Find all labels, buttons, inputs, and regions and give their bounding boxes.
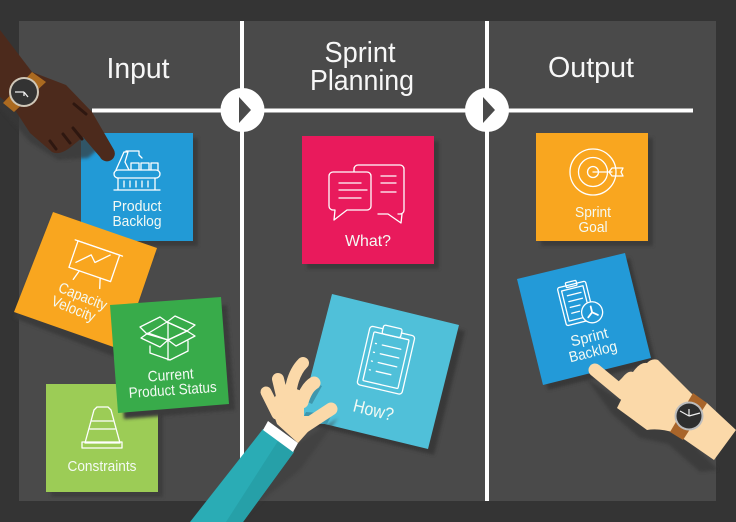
label: [575, 204, 612, 236]
card: Sprint Goal: [536, 133, 653, 246]
label: Product Status: [128, 379, 217, 402]
card: Constraints: [46, 384, 163, 497]
icon: traffic cone: [82, 407, 122, 448]
label: Current: [147, 365, 195, 386]
icon: presentation board: [63, 240, 122, 292]
sleeve: [190, 429, 294, 522]
label: [127, 364, 217, 402]
label: Product: [112, 198, 162, 215]
fingers and palm: [266, 363, 331, 443]
icon: clipboard with clock: [556, 276, 605, 329]
arrow: input to planning: [220, 88, 264, 132]
card: How?: [300, 294, 465, 455]
heading: Input: Input: [106, 53, 170, 85]
label: [564, 323, 619, 366]
cuff: [263, 421, 298, 452]
hand: light hand with sleeve holding how card: [190, 363, 338, 522]
icon: conveyor belt robot: [114, 151, 160, 190]
icon: clipboard: [357, 322, 416, 395]
heading: Sprint Planning: Planning: [310, 65, 414, 97]
heading: Output: Output: [548, 52, 634, 84]
icon: watch: [3, 72, 46, 112]
icon: target with arrow: [570, 149, 623, 195]
card: What?: [302, 136, 439, 269]
card: Capacity Velocity: [14, 212, 157, 358]
icon: watch: [670, 393, 707, 440]
label: Backlog: [112, 213, 162, 230]
label: Capacity: [56, 279, 110, 314]
card: Current Product Status: [110, 297, 235, 419]
hand: light hand with watch pointing at sprint backlog: [586, 359, 736, 472]
heading: Sprint Planning: [310, 37, 414, 97]
icon: speech bubbles: [329, 165, 404, 223]
label: What?: [345, 233, 391, 250]
heading: Sprint Planning: Sprint: [324, 37, 396, 69]
card: Sprint Backlog: [517, 253, 656, 390]
card: Product Backlog: [81, 133, 198, 246]
label: Goal: [578, 219, 608, 236]
finger grooves: [50, 104, 86, 149]
label: Sprint: [569, 325, 611, 350]
column and row grid lines: [92, 21, 693, 501]
hand: dark hand with watch pointing at product backlog: [0, 30, 115, 161]
label: Sprint: [575, 204, 612, 221]
label: Constraints: [68, 458, 136, 475]
label: [112, 198, 162, 230]
arrow: planning to output: [465, 88, 509, 132]
icon: open box: [140, 316, 195, 360]
label: How?: [351, 396, 396, 425]
label: Backlog: [567, 338, 619, 366]
label: [49, 279, 110, 328]
label: Velocity: [49, 293, 98, 326]
